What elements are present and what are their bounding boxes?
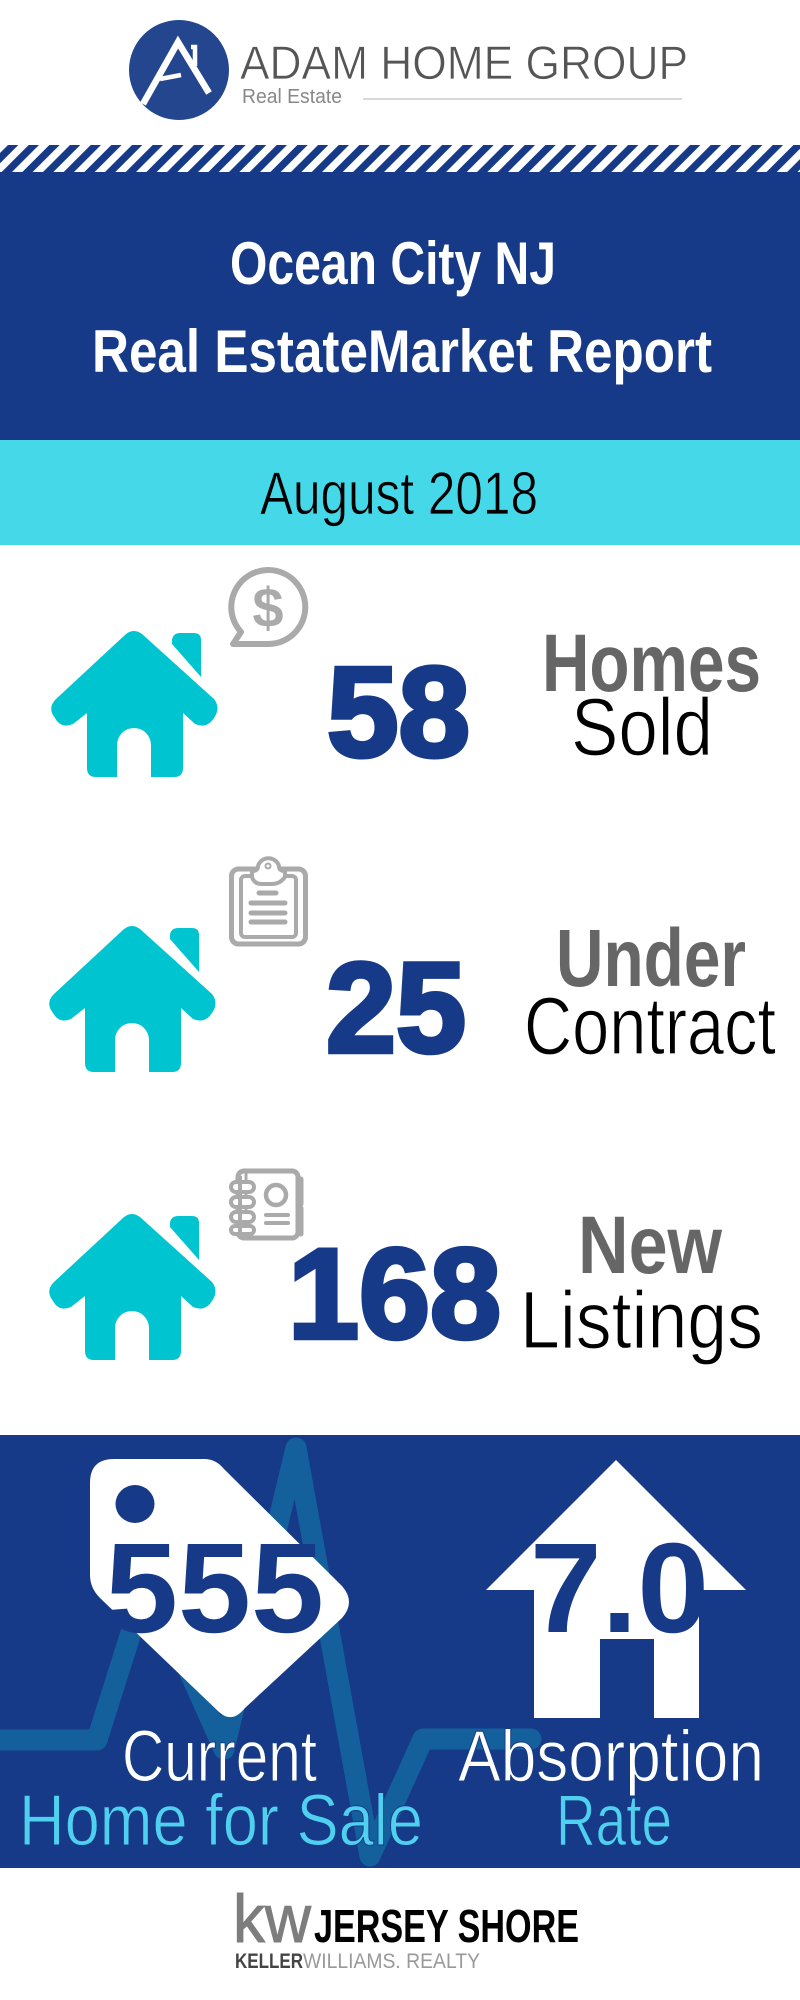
title line 2: Real EstateMarket Report xyxy=(92,318,712,385)
icon: house xyxy=(49,926,216,1072)
brokerage name: WILLIAMS. REALTY xyxy=(303,1950,480,1973)
label: New xyxy=(578,1200,722,1291)
date: August 2018 xyxy=(260,460,538,527)
panel: current inventory and absorption xyxy=(0,1435,800,1868)
label: Under xyxy=(556,913,746,1004)
company name: ADAM HOME GROUP xyxy=(240,36,688,89)
number: 168 xyxy=(288,1223,501,1366)
icon: address book xyxy=(231,1170,301,1239)
logo mark: circle with A-shaped house xyxy=(129,20,229,120)
stat row: under contract xyxy=(49,858,776,1080)
header logo: Adam Home Group xyxy=(129,20,688,120)
label: Rate xyxy=(556,1781,672,1861)
footer logo: Keller Williams Jersey Shore xyxy=(233,1881,579,1973)
title line 1: Ocean City NJ xyxy=(230,230,556,297)
label: Home for Sale xyxy=(19,1781,423,1861)
label: Current xyxy=(122,1717,317,1797)
kw mark: kw xyxy=(233,1881,312,1957)
label: Sold xyxy=(571,682,713,773)
number: 25 xyxy=(326,937,466,1080)
icon: house xyxy=(49,1214,216,1360)
icon: clipboard xyxy=(232,858,306,944)
panel: title banner xyxy=(0,172,800,440)
office name: JERSEY SHORE xyxy=(314,1900,579,1952)
panel: date band xyxy=(0,440,800,545)
number: 555 xyxy=(105,1517,324,1660)
stat row: homes sold xyxy=(51,570,761,784)
number: 7.0 xyxy=(530,1517,709,1660)
brokerage name: KELLER xyxy=(235,1950,303,1973)
tagline: Real Estate xyxy=(242,86,342,108)
chart line: heartbeat pulse xyxy=(0,1448,531,1856)
stat row: new listings xyxy=(49,1170,763,1366)
icon: house-shaped up arrow with rate xyxy=(486,1460,746,1718)
number: 58 xyxy=(327,641,470,784)
label: Absorption xyxy=(458,1717,764,1797)
label: Listings xyxy=(520,1275,763,1366)
icon: dollar speech bubble: $ xyxy=(252,576,284,639)
icon: dollar speech bubble xyxy=(231,570,305,644)
icon: price tag with count xyxy=(90,1459,349,1717)
icon: house xyxy=(51,631,218,777)
